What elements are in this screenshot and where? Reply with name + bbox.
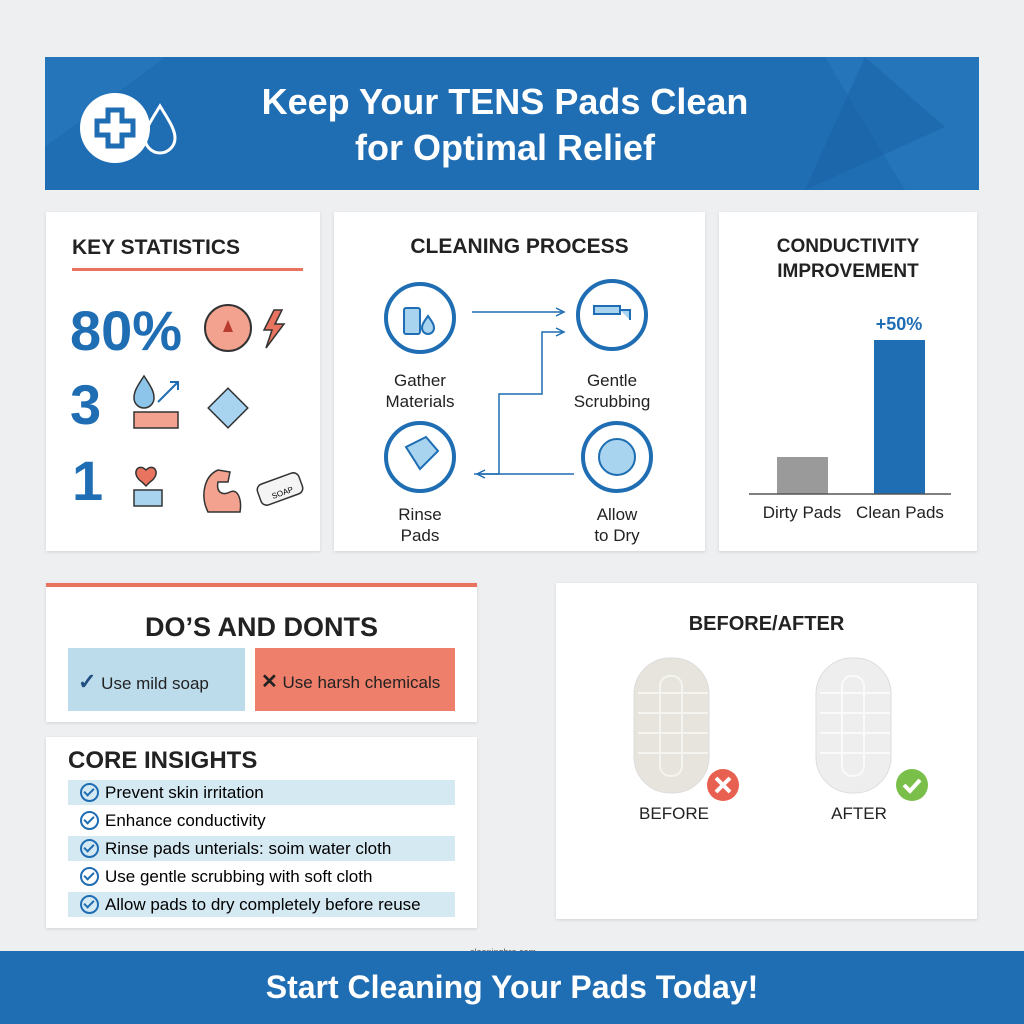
- footer banner: [0, 951, 1024, 1024]
- icon: heart, arm, soap: SOAP: [271, 485, 295, 501]
- footer banner: Start Cleaning Your Pads Today!: [266, 969, 758, 1005]
- panel: before/after: AFTER: [831, 804, 887, 823]
- panel: cleaning process: to Dry: [594, 526, 640, 545]
- insight list: Prevent skin irritation: [105, 783, 264, 802]
- title: [262, 81, 748, 168]
- flow diagram with circles and arrows: [384, 279, 653, 493]
- panel: conductivity improvement: [719, 212, 977, 551]
- heading: cleaning process: CLEANING PROCESS: [410, 235, 629, 258]
- step labels: Gather: [394, 371, 446, 390]
- icon: heart, arm, soap: [133, 466, 304, 513]
- bar chart: +50%: [876, 314, 922, 334]
- heading: BEFORE/AFTER: [689, 613, 844, 635]
- don't box: [255, 648, 455, 711]
- do box: [68, 648, 245, 711]
- icon: skin hydration & patch: [133, 374, 249, 429]
- bar chart: [749, 314, 951, 495]
- insight list: Use gentle scrubbing with soft cloth: [105, 867, 372, 886]
- panel: key statistics: [46, 212, 320, 551]
- stat 80%: 80%: [70, 299, 182, 362]
- panel: core insights: [46, 737, 477, 928]
- heading: CORE INSIGHTS: [68, 747, 257, 774]
- pads illustration: [634, 658, 928, 801]
- step labels: Materials: [386, 392, 454, 411]
- header banner: [45, 57, 979, 190]
- insight list: Enhance conductivity: [105, 811, 266, 830]
- don't box: ✕ Use harsh chemicals: [261, 671, 440, 693]
- panel: cleaning process: Pads: [401, 526, 439, 545]
- panel: before/after: [556, 583, 977, 919]
- title: Keep Your TENS Pads Clean: [262, 81, 748, 122]
- do box: ✓ Use mild soap: [78, 669, 209, 694]
- step labels: [386, 371, 454, 411]
- stat 1: 1: [72, 449, 103, 512]
- insight list: Allow pads to dry completely before reuse: [105, 895, 421, 914]
- panel: do's and don'ts: [46, 583, 477, 722]
- panel: cleaning process: [334, 212, 705, 551]
- watermark: cleaningbro.com: [470, 947, 536, 957]
- panel: cleaning process: Allow: [597, 505, 637, 524]
- heading: conductivity: [777, 236, 919, 282]
- heading: DO’S AND DONTS: [145, 612, 378, 642]
- icon: medical cross and drop: [80, 93, 176, 163]
- heading: conductivity: IMPROVEMENT: [777, 261, 919, 282]
- panel: before/after: BEFORE: [639, 804, 709, 823]
- icon: irritated skin: [204, 304, 286, 352]
- heading: key statistics: KEY STATISTICS: [72, 236, 240, 259]
- stat 3: 3: [70, 373, 101, 436]
- panel: cleaning process: Gentle: [587, 371, 637, 390]
- insight list: Rinse pads unterials: soim water cloth: [105, 839, 391, 858]
- panel: conductivity improvement: Clean Pads: [856, 503, 944, 522]
- title: for Optimal Relief: [355, 127, 655, 168]
- heading: conductivity: CONDUCTIVITY: [777, 236, 919, 257]
- panel: cleaning process: Rinse: [398, 505, 442, 524]
- insight list: [68, 780, 455, 917]
- panel: cleaning process: Scrubbing: [574, 392, 650, 411]
- panel: conductivity improvement: Dirty Pads: [763, 503, 841, 522]
